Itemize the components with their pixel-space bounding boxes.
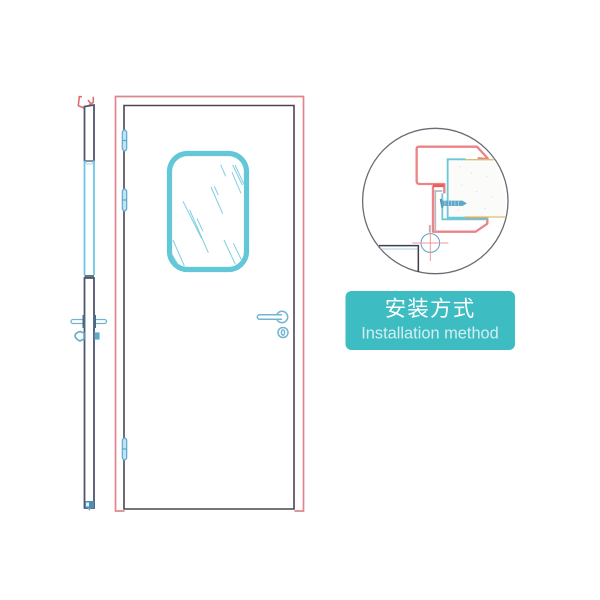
hinge bottom — [122, 438, 127, 460]
teal wall liner — [442, 159, 488, 219]
side view: lower door leaf — [84, 278, 94, 508]
door leaf outline — [124, 106, 294, 509]
door corner — [379, 246, 418, 272]
side view: bottom seal — [85, 501, 94, 511]
door window — [170, 154, 246, 270]
speckles — [458, 166, 492, 211]
window frame — [170, 154, 246, 270]
hinges — [122, 130, 127, 460]
hinge top — [122, 130, 127, 151]
caption badge — [346, 291, 515, 350]
hinge center crosshair — [412, 225, 448, 261]
screw — [441, 199, 467, 208]
side view: top frame profile — [78, 97, 93, 108]
badge title: 安装方式 — [385, 297, 475, 321]
installation detail circle — [363, 128, 508, 274]
side view: lock cylinder — [75, 332, 99, 341]
key cylinder — [278, 328, 288, 338]
yellow wall facing — [466, 160, 505, 217]
handle lever — [257, 311, 288, 323]
hinge middle — [122, 189, 127, 211]
detail circle outline — [363, 128, 508, 274]
glass reflection lines — [172, 165, 244, 266]
grey mounting plate — [430, 191, 442, 232]
door handle — [257, 311, 288, 338]
red frame profile — [417, 147, 488, 232]
side view: handle — [71, 315, 106, 328]
door frame outline — [116, 96, 304, 511]
side view: glass panel — [84, 161, 94, 278]
badge background — [346, 291, 515, 350]
side view: upper door leaf — [84, 105, 94, 161]
side section view of door — [71, 97, 106, 511]
foam wall core — [448, 160, 506, 217]
badge subtitle: Installation method — [361, 324, 499, 342]
